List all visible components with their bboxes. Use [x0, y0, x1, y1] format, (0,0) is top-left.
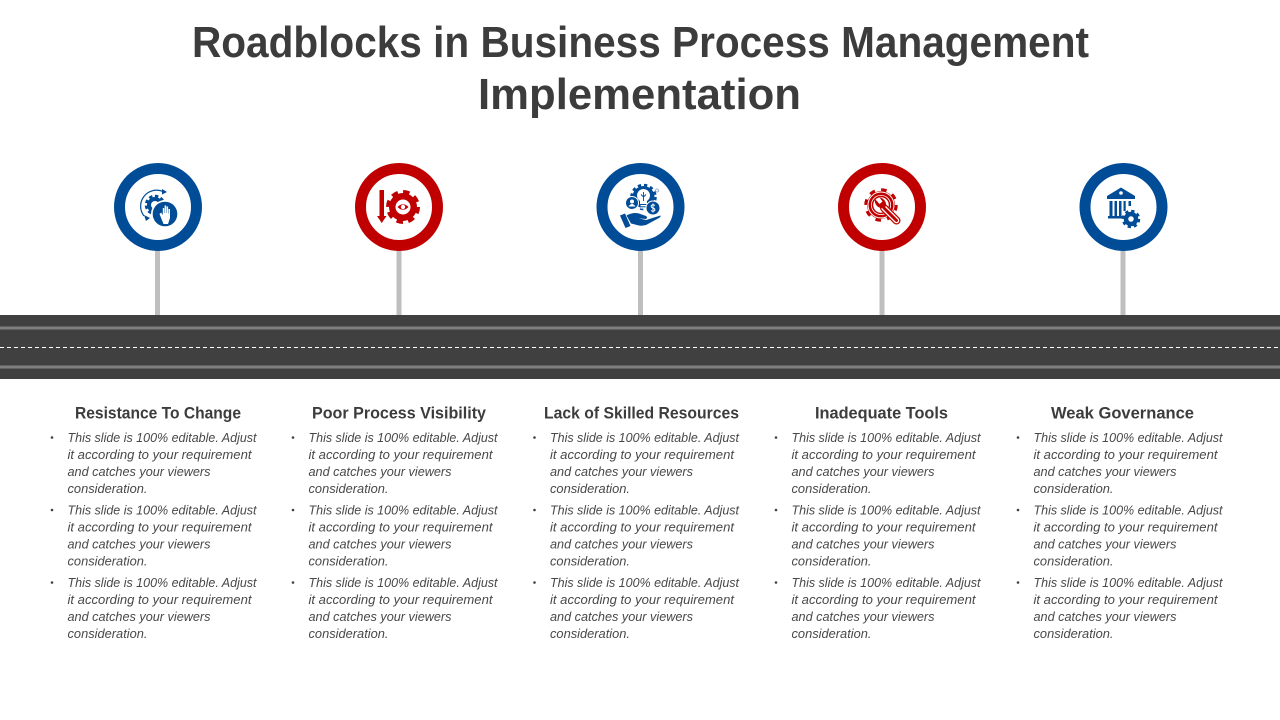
bullet list: This slide is 100% editable. Adjust: [68, 575, 258, 590]
bullet list: and catches your viewers: [792, 609, 935, 624]
bullet list: it according to your requirement: [68, 447, 253, 462]
heading: Resistance To Change: [75, 404, 241, 422]
bullet list: This slide is 100% editable. Adjust: [550, 575, 740, 590]
bullet list: [1017, 430, 1224, 641]
bullet list: and catches your viewers: [792, 536, 935, 552]
heading: Lack of Skilled Resources: [544, 404, 739, 422]
bullet list: consideration.: [308, 626, 388, 641]
bullet list: consideration.: [68, 481, 148, 496]
icon: down arrow and eye gear: [377, 190, 418, 223]
bullet list: consideration.: [792, 626, 872, 641]
bullet list: it according to your requirement: [792, 447, 977, 462]
bullet list: and catches your viewers: [1034, 464, 1177, 479]
bullet list: and catches your viewers: [1034, 536, 1177, 552]
icon: gear and hand: [141, 189, 179, 228]
bullet list: it according to your requirement: [550, 447, 735, 462]
bullet list: and catches your viewers: [308, 536, 452, 552]
bullet list: This slide is 100% editable. Adjust: [1034, 575, 1224, 590]
bullet list: and catches your viewers: [550, 609, 693, 624]
bullet list: it according to your requirement: [550, 520, 735, 534]
bullet list: [51, 430, 258, 641]
heading: Poor Process Visibility: [312, 404, 487, 422]
bullet list: consideration.: [68, 554, 148, 568]
bullet list: consideration.: [68, 626, 148, 641]
bullet list: consideration.: [308, 554, 388, 568]
bullet list: and catches your viewers: [1034, 609, 1177, 624]
bullet list: This slide is 100% editable. Adjust: [550, 502, 740, 518]
bullet list: consideration.: [1034, 481, 1114, 496]
icon: hand holding bulb, gear and coin: [620, 185, 661, 228]
title: Implementation: [478, 70, 801, 119]
bullet list: This slide is 100% editable. Adjust: [68, 430, 258, 445]
road: [0, 315, 1280, 379]
signpost 5: weak governance: [1085, 168, 1162, 315]
bullet list: consideration.: [792, 554, 872, 568]
signpost 4: inadequate tools: [844, 168, 920, 315]
bullet list: and catches your viewers: [68, 609, 211, 624]
bullet list: it according to your requirement: [308, 447, 494, 462]
signpost 1: resistance to change: [120, 168, 196, 315]
bullet list: This slide is 100% editable. Adjust: [1034, 502, 1224, 518]
bullet list: it according to your requirement: [308, 592, 494, 607]
bullet list: This slide is 100% editable. Adjust: [792, 430, 982, 445]
title: Roadblocks in Business Process Management: [192, 18, 1089, 67]
bullet list: it according to your requirement: [68, 592, 253, 607]
bullet list: [775, 430, 982, 641]
bullet list: This slide is 100% editable. Adjust: [792, 575, 982, 590]
bullet list: and catches your viewers: [308, 464, 452, 479]
bullet list: and catches your viewers: [308, 609, 452, 624]
title: [192, 18, 1089, 119]
icon: gear and wrench: [866, 190, 896, 220]
bullet list: and catches your viewers: [550, 536, 693, 552]
bullet list: it according to your requirement: [550, 592, 735, 607]
bullet list: and catches your viewers: [550, 464, 693, 479]
bullet list: it according to your requirement: [308, 520, 494, 534]
icon: institution and gear: [1107, 188, 1139, 227]
bullet list: it according to your requirement: [1034, 447, 1219, 462]
bullet list: it according to your requirement: [1034, 520, 1219, 534]
bullet list: it according to your requirement: [792, 592, 977, 607]
bullet list: [292, 430, 499, 641]
bullet list: and catches your viewers: [792, 464, 935, 479]
bullet list: consideration.: [550, 481, 630, 496]
bullet list: consideration.: [792, 481, 872, 496]
bullet list: consideration.: [1034, 554, 1114, 568]
heading: Weak Governance: [1051, 404, 1194, 422]
bullet list: This slide is 100% editable. Adjust: [308, 575, 499, 590]
bullet list: [533, 430, 740, 641]
column 1: resistance to change: [51, 404, 258, 641]
bullet list: it according to your requirement: [68, 520, 253, 534]
bullet list: it according to your requirement: [1034, 592, 1219, 607]
column 5: weak governance: [1017, 404, 1224, 641]
bullet list: consideration.: [1034, 626, 1114, 641]
bullet list: consideration.: [550, 554, 630, 568]
signpost 2: poor process visibility: [360, 168, 438, 315]
bullet list: This slide is 100% editable. Adjust: [550, 430, 740, 445]
column 2: poor process visibility: [292, 404, 499, 641]
bullet list: it according to your requirement: [792, 520, 977, 534]
bullet list: This slide is 100% editable. Adjust: [308, 430, 499, 445]
bullet list: This slide is 100% editable. Adjust: [1034, 430, 1224, 445]
bullet list: consideration.: [308, 481, 388, 496]
bullet list: This slide is 100% editable. Adjust: [308, 502, 499, 518]
bullet list: and catches your viewers: [68, 464, 211, 479]
bullet list: This slide is 100% editable. Adjust: [68, 502, 258, 518]
bullet list: consideration.: [550, 626, 630, 641]
bullet list: and catches your viewers: [68, 536, 211, 552]
column 3: lack of skilled resources: [533, 404, 740, 641]
signpost 3: lack of skilled resources: [602, 168, 679, 315]
heading: Inadequate Tools: [815, 404, 948, 422]
bullet list: This slide is 100% editable. Adjust: [792, 502, 982, 518]
column 4: inadequate tools: [775, 404, 982, 641]
